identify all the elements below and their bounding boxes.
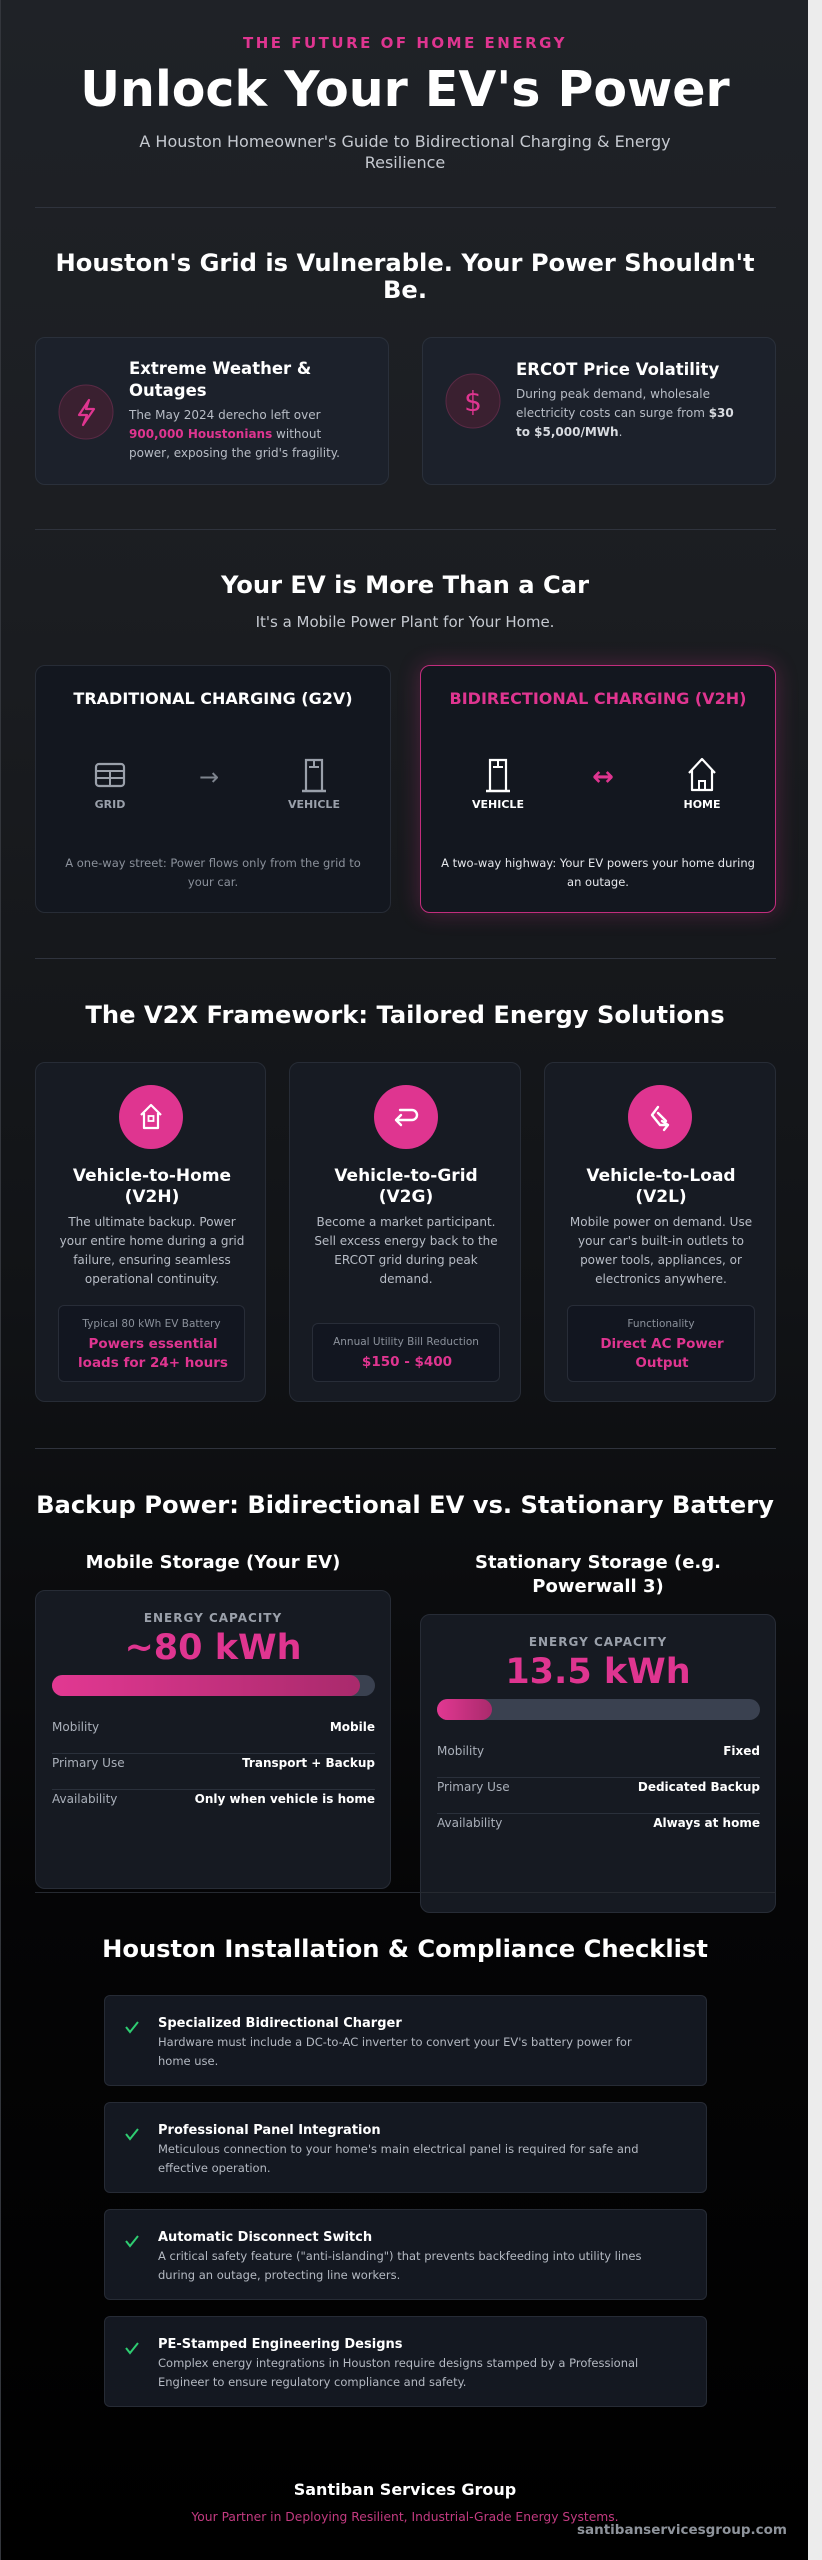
heading: grid vulnerable: Houston's Grid is Vulnerable. Your Power Shouldn't Be. bbox=[55, 249, 755, 304]
icon: home circle bbox=[119, 1085, 183, 1149]
panel: EV capacity: Primary Use bbox=[52, 1756, 125, 1770]
arrow: bidirectional: ↔ bbox=[592, 762, 614, 792]
panel: Powerwall capacity: Availability bbox=[437, 1816, 502, 1830]
stat box bbox=[567, 1305, 755, 1382]
checklist item 1: Hardware must include a DC-to-AC inverter to convert your EV's battery power for home use. bbox=[158, 2035, 632, 2068]
panel: EV capacity: Availability bbox=[52, 1792, 117, 1806]
heading: V2X: The V2X Framework: Tailored Energy Solutions bbox=[85, 1001, 725, 1029]
description: Mobile power on demand. Use your car's built-in outlets to power tools, appliances, or electronics anywhere. bbox=[570, 1215, 752, 1286]
value: ~80 kWh bbox=[124, 1628, 302, 1668]
icon: vehicle bbox=[288, 758, 340, 811]
rows bbox=[52, 1718, 375, 1754]
text: Extreme Weather & Outages bbox=[129, 359, 311, 400]
icon: home bbox=[683, 758, 721, 811]
heading: EV more than car: Your EV is More Than a Car bbox=[221, 571, 589, 599]
panel: Powerwall capacity: Dedicated Backup bbox=[638, 1780, 760, 1794]
checklist item 4 bbox=[104, 2316, 707, 2407]
rows: Mobility bbox=[52, 1720, 99, 1734]
heading: BIDIRECTIONAL CHARGING (V2H) bbox=[450, 689, 746, 708]
panel: Powerwall capacity: ENERGY CAPACITY bbox=[529, 1635, 667, 1649]
panel: ERCOT price bbox=[422, 337, 776, 485]
text bbox=[128, 359, 340, 460]
icon: dollar bbox=[446, 374, 500, 428]
text: ERCOT Price Volatility bbox=[516, 360, 719, 379]
icon: return arrow circle bbox=[374, 1085, 438, 1149]
stat box: $150 - $400 bbox=[362, 1354, 452, 1370]
description: The ultimate backup. Power your entire home during a grid failure, ensuring seamless operational continuity. bbox=[60, 1215, 244, 1286]
rows: Fixed bbox=[723, 1744, 760, 1758]
panel: Powerwall capacity: Primary Use bbox=[437, 1780, 510, 1794]
rows: Mobile bbox=[330, 1720, 375, 1734]
text: The May 2024 derecho left over 900,000 Houstonians without power, exposing the grid's fragility. bbox=[129, 408, 340, 460]
checklist item 1: Specialized Bidirectional Charger bbox=[158, 2016, 402, 2031]
icon: grid: GRID bbox=[95, 798, 125, 811]
panel: EV capacity: ENERGY CAPACITY bbox=[144, 1611, 282, 1625]
panel: Powerwall capacity: Always at home bbox=[653, 1816, 760, 1830]
icon: vehicle: VEHICLE bbox=[288, 798, 340, 811]
checklist item 2: Professional Panel Integration bbox=[158, 2123, 381, 2138]
panel: G2V bbox=[35, 665, 391, 913]
footer: tagline: Your Partner in Deploying Resilient, Industrial-Grade Energy Systems. bbox=[191, 2510, 619, 2524]
stat box bbox=[58, 1305, 245, 1382]
kicker: THE FUTURE OF HOME ENERGY bbox=[243, 34, 567, 52]
footer: company: Santiban Services Group bbox=[294, 2480, 516, 2499]
panel: V2H card bbox=[35, 1062, 266, 1402]
rows: Mobility bbox=[437, 1744, 484, 1758]
checklist item 4: Complex energy integrations in Houston require designs stamped by a Professional Engineer to ensure regulatory compliance and safety. bbox=[158, 2356, 638, 2389]
icon: plug circle bbox=[628, 1085, 692, 1149]
text: During peak demand, wholesale electricity costs can surge from $30 to $5,000/MWh. bbox=[516, 387, 734, 439]
value: 13.5 kWh bbox=[505, 1652, 691, 1692]
stat box: Typical 80 kWh EV Battery bbox=[82, 1318, 221, 1330]
panel: V2G card bbox=[289, 1062, 521, 1402]
title: Vehicle-to-Load (V2L) bbox=[586, 1166, 736, 1207]
icon: vehicle bbox=[472, 758, 524, 811]
checklist item 2 bbox=[104, 2102, 707, 2193]
caption: A one-way street: Power flows only from the grid to your car. bbox=[65, 856, 361, 889]
stat box bbox=[312, 1323, 500, 1382]
panel: EV capacity: Transport + Backup bbox=[242, 1756, 375, 1770]
icon: dollar: $ bbox=[464, 385, 482, 418]
checklist item 4: PE-Stamped Engineering Designs bbox=[158, 2337, 402, 2352]
checklist item 3: A critical safety feature ("anti-islanding") that prevents backfeeding into utility lines during an outage, protecting line workers. bbox=[158, 2249, 641, 2282]
checklist item 1 bbox=[104, 1995, 707, 2086]
subtitle: A Houston Homeowner's Guide to Bidirectional Charging & Energy Resilience bbox=[139, 132, 671, 172]
subheading: It's a Mobile Power Plant for Your Home. bbox=[256, 613, 554, 631]
subheading: stationary storage: Stationary Storage (e.g. Powerwall 3) bbox=[475, 1552, 721, 1597]
subheading: mobile storage: Mobile Storage (Your EV) bbox=[86, 1552, 340, 1573]
stat box: Functionality bbox=[627, 1318, 695, 1330]
description: Become a market participant. Sell excess energy back to the ERCOT grid during peak demand. bbox=[314, 1215, 498, 1286]
stat box: Annual Utility Bill Reduction bbox=[333, 1336, 479, 1348]
panel: V2L card bbox=[544, 1062, 776, 1402]
title: Unlock Your EV's Power bbox=[80, 61, 730, 118]
bar bbox=[52, 1675, 375, 1696]
panel: extreme weather bbox=[35, 337, 389, 485]
panel: EV capacity: Only when vehicle is home bbox=[195, 1792, 375, 1806]
stat box: Powers essential loads for 24+ hours bbox=[78, 1336, 228, 1371]
rows bbox=[437, 1742, 760, 1778]
heading: TRADITIONAL CHARGING (G2V) bbox=[73, 689, 353, 708]
title: Vehicle-to-Grid (V2G) bbox=[334, 1166, 478, 1207]
arrow: → bbox=[199, 763, 219, 791]
icon: lightning bbox=[58, 384, 114, 440]
title: Vehicle-to-Home (V2H) bbox=[73, 1166, 231, 1207]
checklist item 3: Automatic Disconnect Switch bbox=[158, 2230, 372, 2245]
icon: grid bbox=[94, 762, 126, 811]
heading: checklist: Houston Installation & Compliance Checklist bbox=[102, 1935, 708, 1963]
text bbox=[516, 360, 734, 439]
icon: home: HOME bbox=[683, 798, 721, 811]
panel: Powerwall capacity bbox=[420, 1614, 776, 1913]
panel: EV capacity bbox=[35, 1590, 391, 1889]
panel: V2H bbox=[420, 665, 776, 913]
checklist item 3 bbox=[104, 2209, 707, 2300]
bar bbox=[437, 1699, 760, 1720]
heading: backup power: Backup Power: Bidirectional EV vs. Stationary Battery bbox=[36, 1491, 774, 1519]
footer: url: santibanservicesgroup.com bbox=[577, 2522, 787, 2538]
stat box: Direct AC Power Output bbox=[600, 1336, 724, 1371]
icon: vehicle: VEHICLE bbox=[472, 798, 524, 811]
caption: A two-way highway: Your EV powers your home during an outage. bbox=[441, 856, 755, 889]
checklist item 2: Meticulous connection to your home's main electrical panel is required for safe and effective operation. bbox=[158, 2142, 638, 2175]
